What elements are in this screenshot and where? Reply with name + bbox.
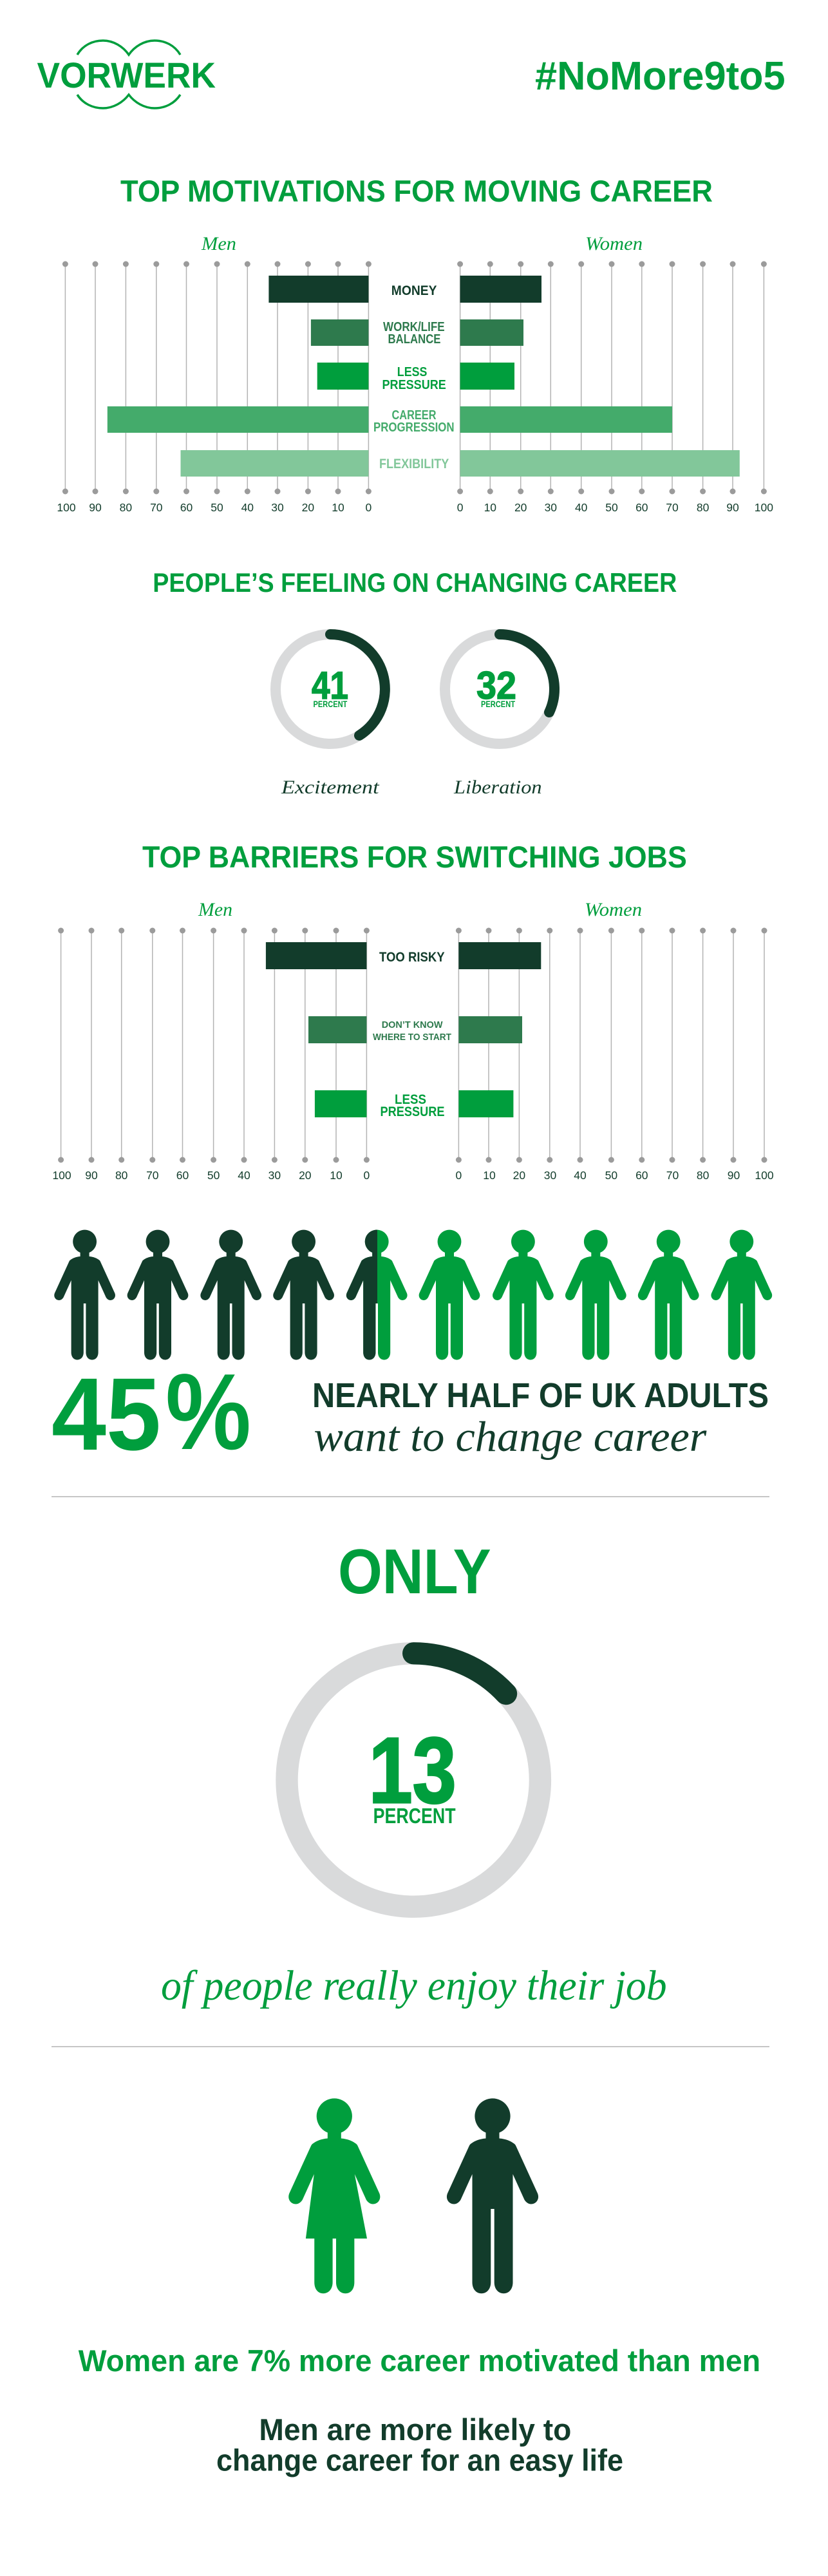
label: don't know where to start: WHERE TO START	[373, 1032, 451, 1043]
bars: less pressure	[317, 363, 514, 390]
header logo: Vorwerk: VORWERK	[37, 55, 216, 95]
donut: excitement 41 percent: 41	[312, 664, 348, 707]
bars: work/life balance	[311, 319, 523, 346]
axis numbers: 20	[302, 501, 314, 514]
axis numbers: 70	[666, 501, 679, 514]
axis numbers: 90	[728, 1169, 740, 1182]
label: less pressure	[380, 1092, 444, 1119]
axis numbers: 10	[330, 1169, 343, 1182]
axis numbers: 80	[120, 501, 132, 514]
axis numbers: 40	[238, 1169, 250, 1182]
axis numbers: 20	[299, 1169, 312, 1182]
label: too risky: TOO RISKY	[379, 950, 445, 965]
axis numbers: 90	[726, 501, 739, 514]
donut: excitement 41 percent	[276, 634, 385, 744]
label: less pressure	[382, 365, 446, 392]
donut: excitement 41 percent: PERCENT	[313, 699, 348, 709]
text: men more likely: Men are more likely to	[259, 2412, 571, 2447]
axis numbers: 10	[483, 1169, 496, 1182]
axis numbers: 60	[180, 501, 193, 514]
axis numbers: 90	[89, 501, 102, 514]
axis numbers: 20	[513, 1169, 525, 1182]
axis numbers: 100	[755, 501, 773, 514]
axis numbers: 10	[484, 501, 496, 514]
stat: 45 percent	[52, 1351, 251, 1472]
icon: woman	[288, 2098, 380, 2293]
donut: 13 percent	[287, 1653, 540, 1907]
axis numbers: 40	[574, 1169, 587, 1182]
axis numbers: 60	[635, 1169, 648, 1182]
text: women more career motivated: Women are 7% more career motivated than men	[79, 2344, 760, 2378]
bars: flexibility	[180, 450, 740, 477]
label: career progression: CAREER	[391, 408, 437, 422]
axis numbers: 60	[635, 501, 648, 514]
stat: 45 percent: %	[165, 1351, 251, 1472]
panel: barriers chart	[52, 899, 774, 1182]
axis numbers	[52, 1169, 774, 1182]
icon: man	[447, 2098, 538, 2293]
axis numbers: 30	[545, 501, 557, 514]
pictogram: ten people, 45 percent	[54, 1230, 772, 1360]
bars: money	[268, 276, 541, 303]
label: less pressure: LESS	[395, 1092, 426, 1107]
bars: don't know where to start	[308, 1016, 522, 1043]
axis numbers: 80	[697, 1169, 710, 1182]
axis numbers: 30	[268, 1169, 281, 1182]
axis title: men: Men	[201, 233, 236, 254]
label: less pressure: PRESSURE	[380, 1104, 444, 1119]
axis numbers: 90	[85, 1169, 98, 1182]
heading: top motivations: TOP MOTIVATIONS FOR MOVING CAREER	[120, 174, 713, 208]
header logo: Vorwerk	[37, 41, 216, 108]
axis title: women: Women	[585, 233, 643, 254]
donut: liberation 32 percent: PERCENT	[481, 699, 515, 709]
donut: 13 percent: PERCENT	[373, 1804, 456, 1828]
heading: only: ONLY	[338, 1536, 491, 1607]
axis numbers: 70	[150, 501, 163, 514]
axis numbers: 50	[211, 501, 223, 514]
axis numbers: 0	[457, 501, 464, 514]
axis numbers: 40	[575, 501, 588, 514]
donut: 13 percent: 13	[369, 1718, 456, 1823]
text: nearly half of UK adults: NEARLY HALF OF UK ADULTS	[312, 1376, 769, 1415]
stat: 45 percent: 45	[52, 1356, 161, 1472]
caption: liberation: Liberation	[453, 777, 542, 798]
label: less pressure: PRESSURE	[382, 378, 446, 392]
bars: too risky	[266, 942, 541, 969]
text: men more likely: change career for an easy life	[216, 2443, 623, 2477]
label: money: MONEY	[391, 283, 437, 298]
axis numbers: 0	[456, 1169, 462, 1182]
axis numbers: 0	[364, 1169, 370, 1182]
axis numbers: 100	[755, 1169, 774, 1182]
axis numbers: 0	[366, 501, 372, 514]
label: work/life balance: WORK/LIFE	[383, 320, 445, 334]
label: career progression	[373, 408, 455, 435]
axis numbers: 60	[176, 1169, 189, 1182]
panel: motivations chart	[57, 233, 773, 514]
text: of people really enjoy their job: of people really enjoy their job	[161, 1962, 667, 2009]
axis numbers: 10	[332, 501, 344, 514]
donut: liberation 32 percent	[445, 634, 554, 744]
axis numbers: 80	[115, 1169, 128, 1182]
axis numbers: 20	[514, 501, 527, 514]
hashtag: #NoMore9to5	[535, 54, 786, 99]
bars: less pressure	[315, 1090, 513, 1117]
axis numbers: 40	[241, 501, 254, 514]
axis numbers: 80	[697, 501, 710, 514]
label: career progression: PROGRESSION	[373, 421, 455, 435]
label: work/life balance	[383, 320, 445, 346]
caption: excitement: Excitement	[281, 777, 379, 798]
axis numbers: 100	[52, 1169, 71, 1182]
label: work/life balance: BALANCE	[388, 332, 440, 346]
heading: top barriers: TOP BARRIERS FOR SWITCHING JOBS	[142, 840, 687, 874]
label: don't know where to start: DON’T KNOW	[382, 1019, 443, 1030]
heading: feelings: PEOPLE’S FEELING ON CHANGING CAREER	[153, 567, 677, 598]
axis numbers: 30	[271, 501, 284, 514]
axis title: men: Men	[198, 899, 232, 920]
axis title: women: Women	[585, 899, 642, 920]
axis numbers	[57, 501, 773, 514]
bars: career progression	[108, 406, 672, 433]
axis numbers: 50	[207, 1169, 220, 1182]
label: don't know where to start	[373, 1019, 451, 1043]
axis numbers: 100	[57, 501, 76, 514]
label: less pressure: LESS	[397, 365, 428, 379]
label: flexibility: FLEXIBILITY	[379, 457, 449, 471]
axis numbers: 70	[146, 1169, 159, 1182]
text: men more likely	[216, 2412, 623, 2477]
axis numbers: 30	[544, 1169, 556, 1182]
text: want to change career: want to change career	[314, 1413, 707, 1461]
axis numbers: 50	[605, 501, 618, 514]
donut: liberation 32 percent: 32	[476, 664, 516, 707]
axis numbers: 70	[666, 1169, 679, 1182]
axis numbers: 50	[605, 1169, 617, 1182]
